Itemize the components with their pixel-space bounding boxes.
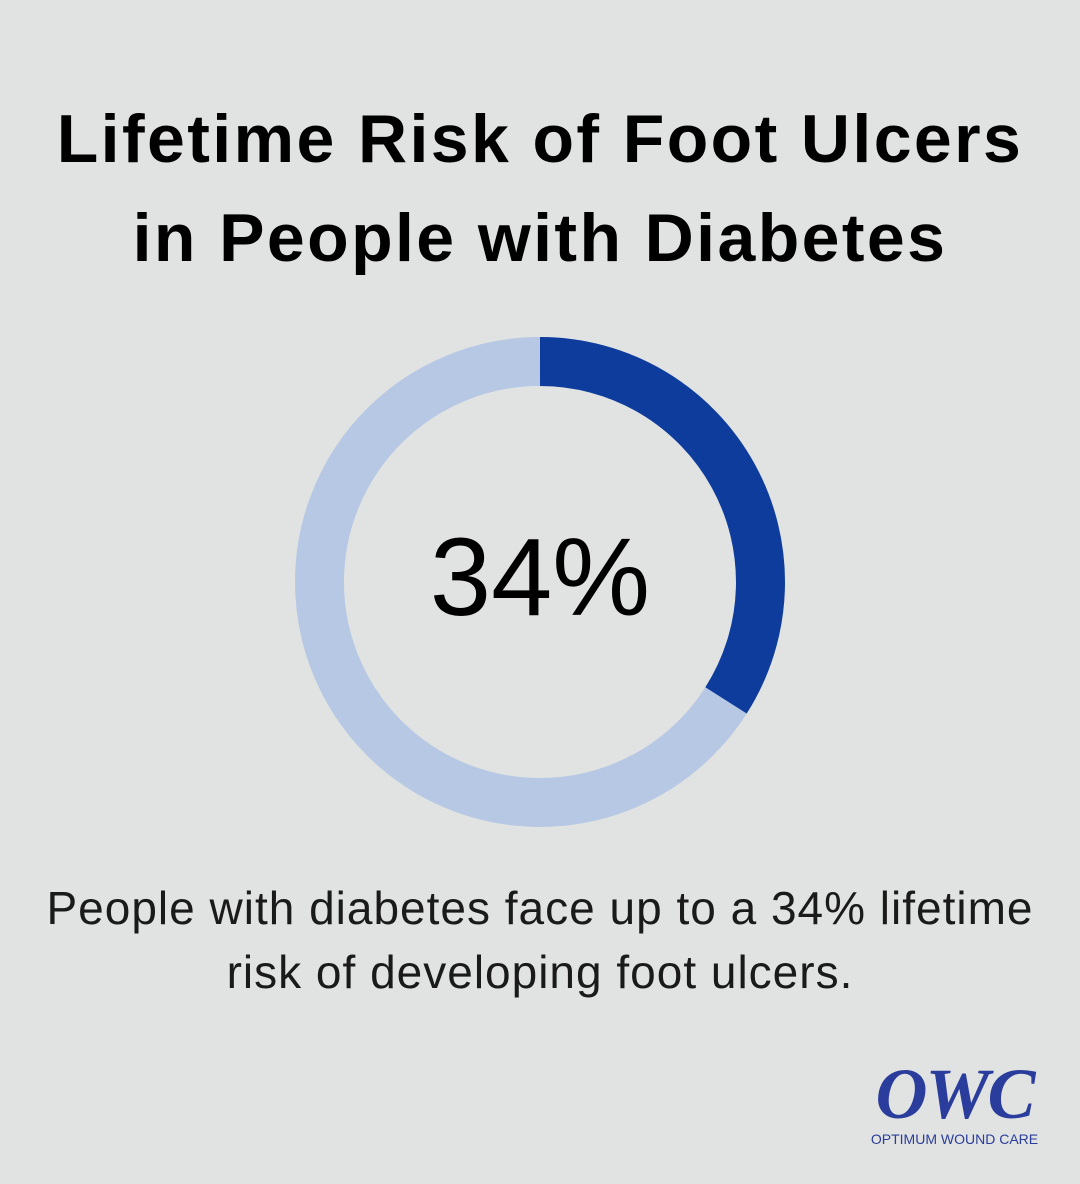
logo: OPTIMUM WOUND CARE bbox=[871, 1131, 1038, 1147]
title: Lifetime Risk of Foot Ulcers bbox=[57, 101, 1023, 177]
logo: OWC bbox=[875, 1054, 1034, 1134]
donut chart: 34% bbox=[430, 516, 650, 639]
title bbox=[57, 101, 1023, 276]
title: in People with Diabetes bbox=[133, 200, 947, 276]
description text: risk of developing foot ulcers. bbox=[227, 946, 853, 998]
description text bbox=[46, 882, 1034, 998]
description text: People with diabetes face up to a 34% lifetime bbox=[46, 882, 1034, 934]
